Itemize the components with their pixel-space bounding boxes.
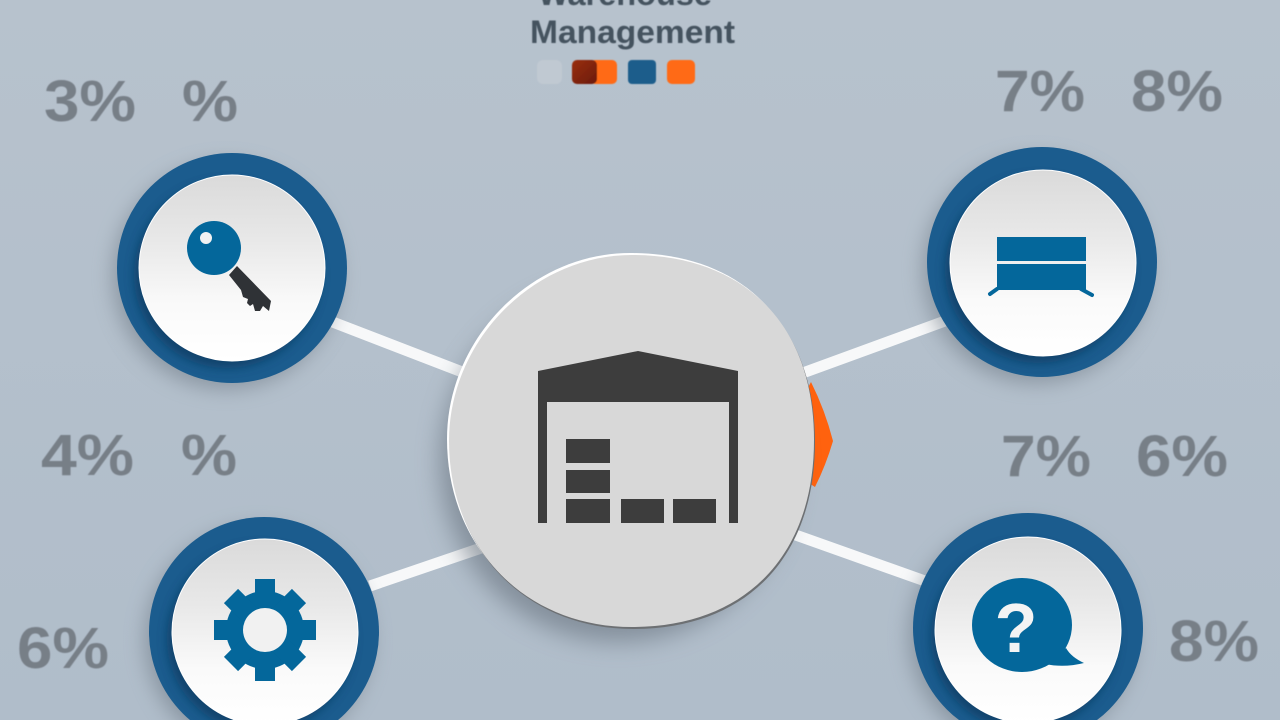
orange accent	[804, 382, 833, 487]
percent labels: 6%	[1136, 424, 1228, 489]
percent labels: 7%	[995, 59, 1085, 124]
percent labels: 8%	[1131, 59, 1223, 124]
percent labels: 4%	[41, 423, 134, 488]
node: key	[113, 153, 347, 389]
connector lines	[330, 321, 945, 586]
node: question	[909, 513, 1143, 720]
icon: key	[187, 221, 271, 311]
hub rim	[447, 253, 812, 625]
legend swatches	[537, 60, 695, 84]
hub disc	[449, 255, 814, 627]
percent labels: 6%	[17, 616, 109, 681]
icon: pallet	[990, 237, 1092, 295]
central hub	[440, 253, 815, 642]
percent labels: 3%	[44, 69, 136, 134]
percent labels: %	[182, 69, 238, 134]
percent labels: 7%	[1001, 424, 1091, 489]
icon: question bubble: ?	[995, 589, 1037, 667]
node: pallet	[923, 147, 1157, 383]
hub shadow	[440, 282, 796, 642]
title	[530, 0, 735, 50]
hub lower edge	[450, 257, 815, 629]
warehouse icon	[538, 351, 738, 523]
node: gear	[145, 517, 379, 720]
percent labels: 8%	[1169, 609, 1259, 674]
percent labels: %	[181, 423, 237, 488]
icon: question bubble	[972, 578, 1084, 672]
icon: gear	[214, 579, 316, 681]
title: Management	[530, 14, 735, 50]
